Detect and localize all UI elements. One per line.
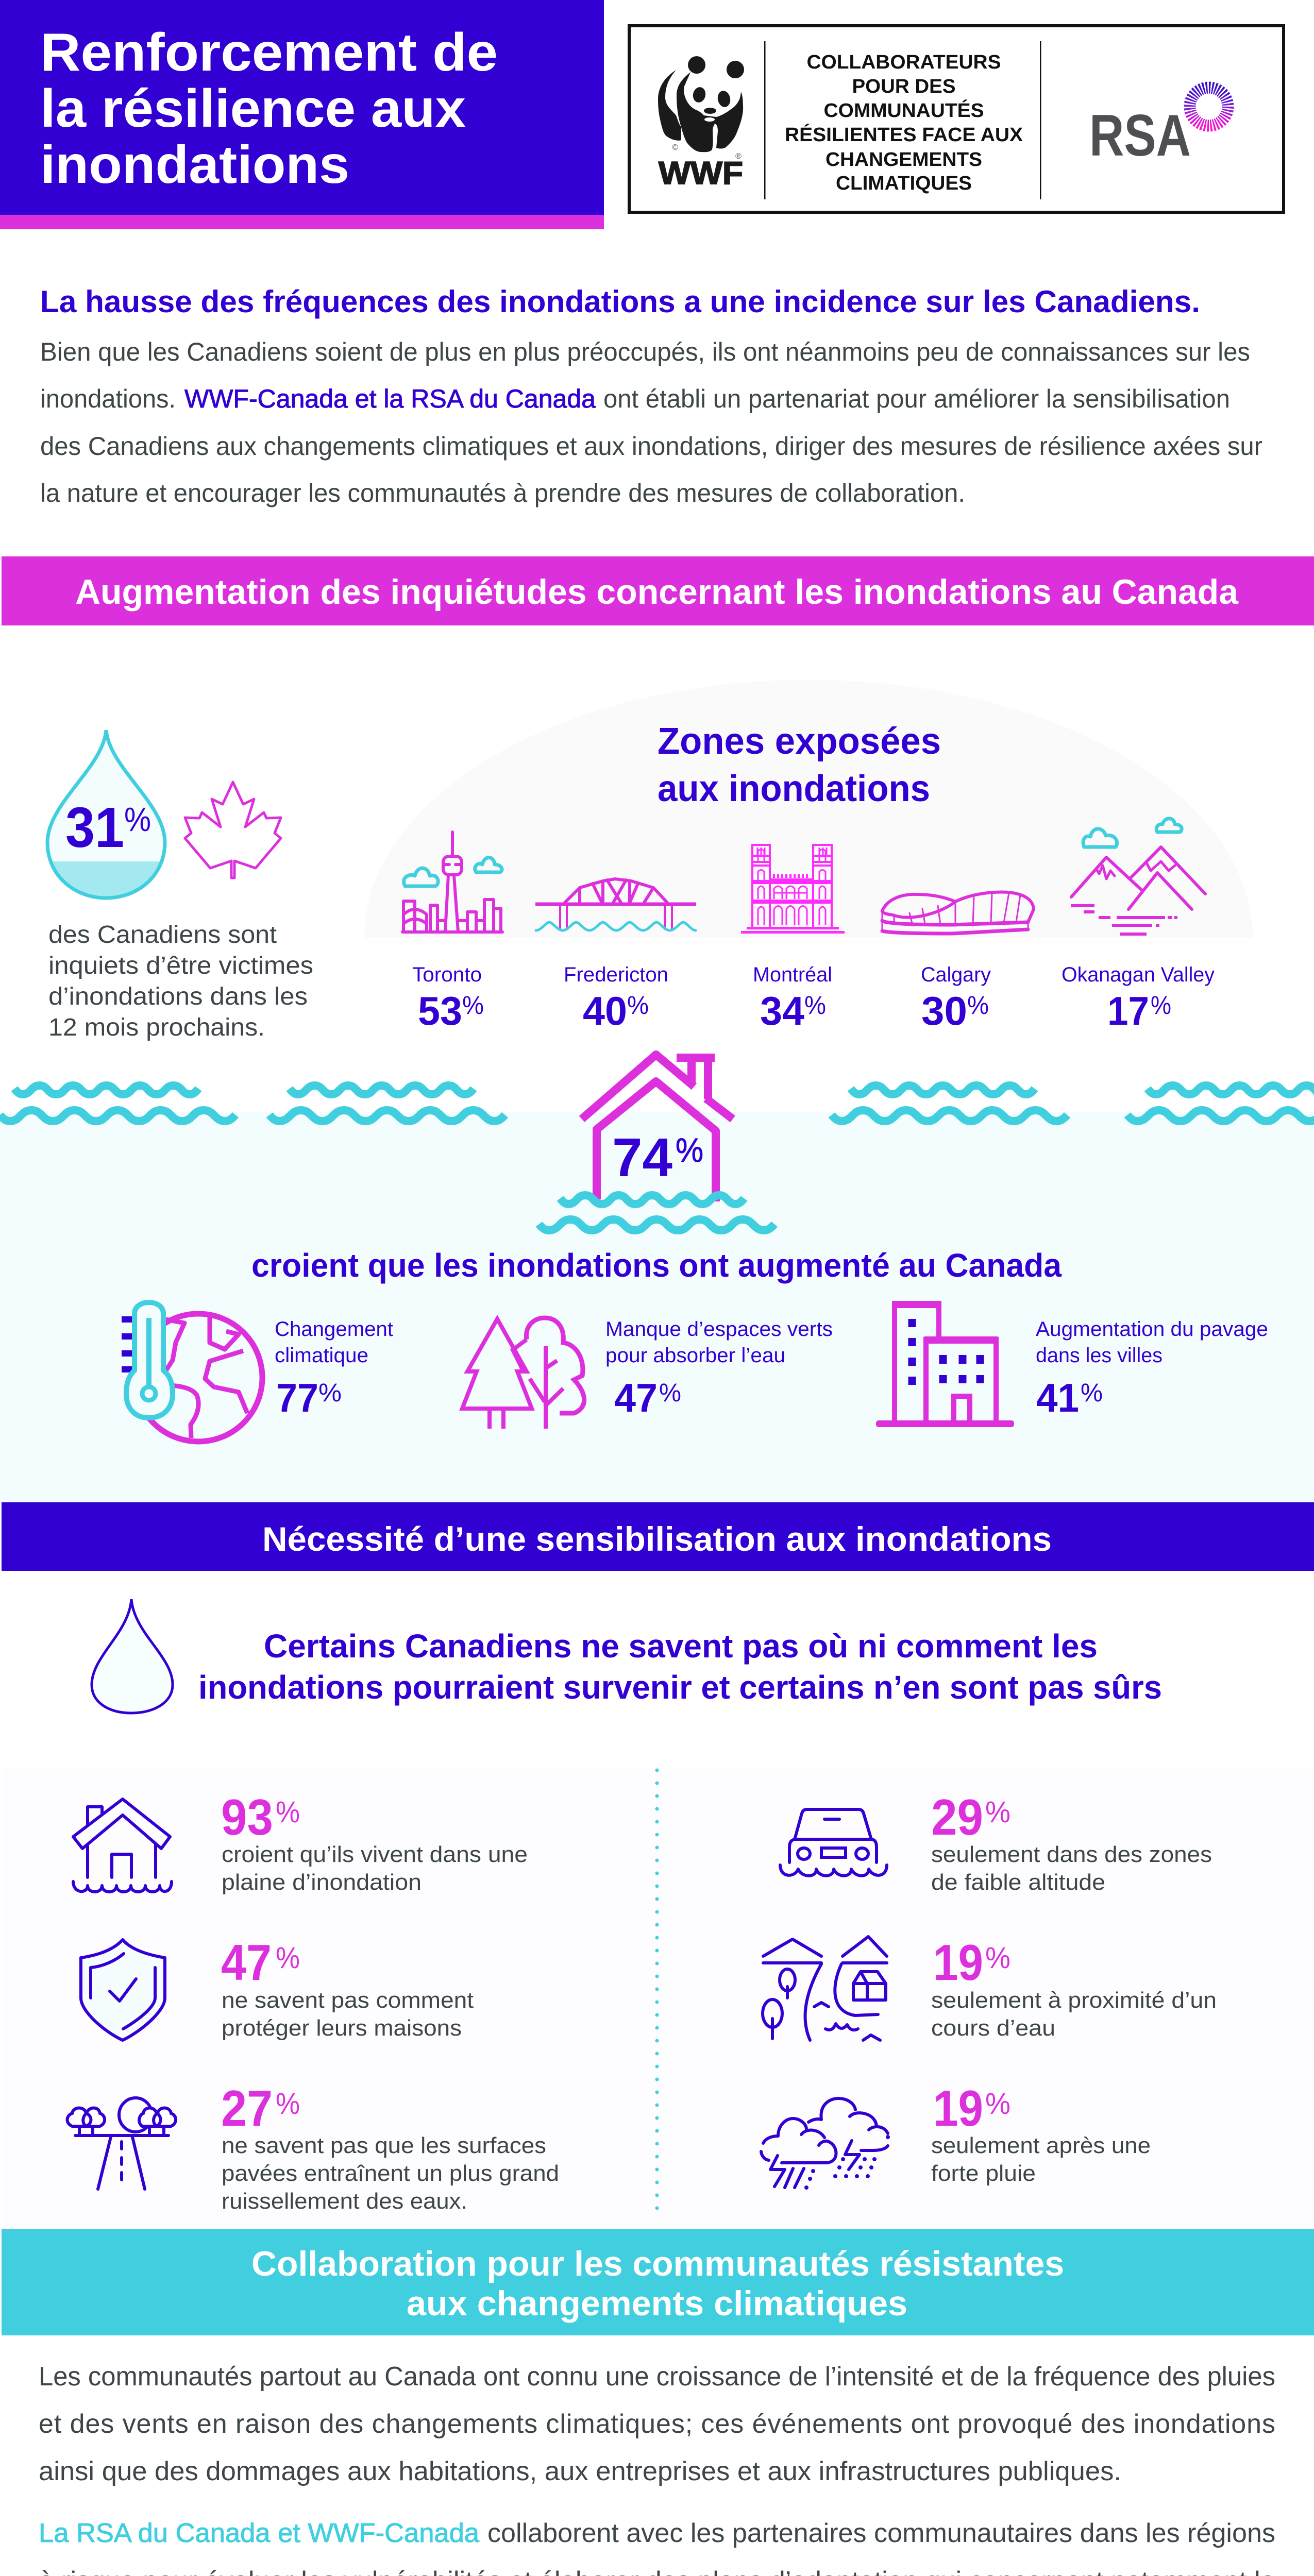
icon: house 74%: % [676, 1131, 703, 1169]
stat: changement climatique: 77 [276, 1375, 318, 1420]
31% caption [48, 921, 313, 1041]
stat: 93%: % [276, 1795, 300, 1829]
stat: 27% pavement: ne savent pas que les surfaces [222, 2133, 546, 2158]
stat: manque d'espaces verts: 47 [614, 1375, 658, 1420]
panel: 31% drop and maple leaf [47, 730, 313, 1041]
stat: 19% waterway [763, 1934, 1217, 2041]
city statistics: % [627, 991, 649, 1020]
31% caption: d’inondations dans les [48, 983, 308, 1010]
city statistics: Calgary [921, 963, 991, 986]
stat: 19% waterway: cours d’eau [931, 2015, 1055, 2041]
paragraph 1: et des vents en raison des changements climatiques; ces événements ont provoqué des inondations [39, 2409, 1275, 2439]
icon: maple leaf [185, 782, 281, 878]
stat: 19% waterway: 19 [933, 1934, 983, 1991]
stat: manque d'espaces verts [462, 1318, 833, 1429]
icon: flooded house [73, 1799, 172, 1892]
city statistics: Toronto [412, 963, 482, 986]
stat: 47% protection: ne savent pas comment [222, 1988, 474, 2013]
intro paragraph: la nature et encourager les communautés à prendre des mesures de collaboration. [40, 479, 965, 507]
icon: Toronto skyline [402, 832, 502, 932]
stat: 19% heavy rain: % [985, 2087, 1010, 2121]
section banner: Collaboration [2, 2229, 1314, 2335]
city statistics: Montréal [753, 963, 832, 986]
stat: 29% low altitude: seulement dans des zones [931, 1842, 1212, 1867]
panel: awareness heading [92, 1599, 1162, 1713]
partnership text: COLLABORATEURS [807, 52, 1001, 73]
section banner: Collaboration: Collaboration pour les communautés résistantes [251, 2244, 1064, 2283]
panel: partner logos [629, 26, 1284, 212]
intro paragraph: inondations. [40, 384, 176, 413]
31% caption: inquiets d’être victimes [48, 952, 313, 979]
flood waves [0, 1086, 1314, 1121]
stat: 93%: croient qu’ils vivent dans une [222, 1842, 528, 1867]
city statistics: % [967, 991, 989, 1020]
stat: 27% pavement: ruissellement des eaux. [222, 2189, 467, 2214]
icon: Okanagan mountains [1071, 819, 1205, 934]
awareness heading text: inondations pourraient survenir et certains n’en sont pas sûrs [198, 1669, 1162, 1706]
31% caption: des Canadiens sont [48, 921, 277, 948]
title: inondations [40, 135, 349, 195]
city statistics: 53 [418, 988, 462, 1033]
icon: WWF panda logo [658, 56, 744, 191]
icon: flooded car [780, 1809, 887, 1876]
paragraph 1 [39, 2362, 1275, 2486]
partnership text: CLIMATIQUES [836, 173, 972, 194]
paragraph 1: Les communautés partout au Canada ont connu une croissance de l’intensité et de la fréquence des pluies [39, 2362, 1275, 2392]
stat: 29% low altitude: % [985, 1795, 1010, 1829]
collaboration text block [39, 2362, 1275, 2576]
stat: changement climatique: % [318, 1378, 342, 1407]
icon: WWF panda logo: ® [735, 152, 742, 161]
icon: river and houses [763, 1937, 887, 2040]
stat: 19% heavy rain [761, 2080, 1151, 2188]
icon: shield [81, 1940, 165, 2040]
title: la résilience aux [40, 79, 466, 139]
stat: 19% waterway: seulement à proximité d’un [931, 1988, 1217, 2013]
zones heading [658, 721, 941, 809]
section banner: Augmentation des inquiétudes: Augmentation des inquiétudes concernant les inondations au Canada [75, 572, 1239, 612]
header title block [0, 0, 604, 229]
stat: changement climatique [122, 1302, 393, 1442]
partnership text: POUR DES [852, 76, 955, 97]
intro heading: La hausse des fréquences des inondations a une incidence sur les Canadiens. [40, 284, 1200, 319]
zones heading: aux inondations [658, 768, 930, 809]
partnership text: COMMUNAUTÉS [823, 99, 984, 122]
section banner: Nécessité d'une sensibilisation: Nécessité d’une sensibilisation aux inondations [262, 1520, 1052, 1558]
paragraph 2 [39, 2518, 1275, 2576]
intro paragraph [40, 337, 1262, 507]
stat: 29% low altitude: de faible altitude [931, 1870, 1105, 1895]
city statistics: 30 [921, 988, 967, 1033]
city statistics: Okanagan Valley [1062, 963, 1215, 986]
city statistics: % [462, 991, 484, 1020]
panel: awareness statistics [2, 1768, 1314, 2229]
icon: road with trees [68, 2098, 176, 2189]
intro text block [40, 284, 1262, 507]
partnership text: CHANGEMENTS [826, 149, 982, 171]
stat: augmentation du pavage [876, 1301, 1268, 1427]
city statistics: % [804, 991, 826, 1020]
icon: house 74% [539, 1054, 774, 1230]
city statistics: 40 [583, 988, 627, 1033]
stat: augmentation du pavage: 41 [1036, 1375, 1079, 1420]
partnership text: RÉSILIENTES FACE AUX [785, 123, 1023, 146]
icon: Montréal basilica [741, 845, 845, 934]
intro paragraph: des Canadiens aux changements climatiques et aux inondations, diriger des mesures de résilience axées sur [40, 432, 1262, 461]
stat: changement climatique: climatique [275, 1344, 368, 1367]
icon: globe and thermometer [122, 1302, 262, 1442]
icon: RSA logo: RSA [1089, 103, 1191, 168]
icon: buildings [876, 1301, 1014, 1427]
paragraph 2: collaborent avec les partenaires communautaires dans les régions [487, 2518, 1275, 2548]
city statistics: 34 [760, 988, 804, 1033]
icon: Fredericton bridge [535, 879, 696, 930]
intro paragraph: Bien que les Canadiens soient de plus en plus préoccupés, ils ont néanmoins peu de connaissances sur les [40, 337, 1250, 366]
awareness heading text [198, 1628, 1162, 1706]
icon: Calgary saddledome [882, 892, 1034, 934]
panel: flood band 74% [0, 1054, 1314, 1502]
stat: 27% pavement [68, 2080, 559, 2214]
icon: water drop 31%: 31 [65, 796, 124, 859]
city statistics: 17 [1107, 988, 1149, 1033]
stat: 19% heavy rain: forte pluie [931, 2161, 1036, 2186]
stat: augmentation du pavage: Augmentation du pavage [1036, 1318, 1268, 1341]
icon: house 74%: 74 [612, 1127, 672, 1188]
stat: 29% low altitude: 29 [931, 1789, 983, 1845]
stat: augmentation du pavage: % [1081, 1378, 1103, 1407]
icon: trees [462, 1318, 584, 1429]
title: Renforcement de [40, 23, 498, 82]
stat: 47% protection [81, 1934, 474, 2041]
intro paragraph: WWF-Canada et la RSA du Canada [184, 384, 596, 413]
stat: manque d'espaces verts: % [659, 1378, 681, 1407]
stat: 27% pavement: 27 [221, 2080, 273, 2137]
icon: water drop outline [92, 1599, 173, 1713]
stat: 93%: 93 [221, 1789, 273, 1845]
partnership text [785, 52, 1023, 194]
intro paragraph: ont établi un partenariat pour améliorer la sensibilisation [603, 384, 1230, 413]
icon: WWF panda logo: © [672, 143, 678, 152]
stat: 47% protection: % [276, 1941, 300, 1975]
stat: 29% low altitude [780, 1789, 1212, 1895]
stat: 27% pavement: % [276, 2087, 300, 2121]
awareness heading text: Certains Canadiens ne savent pas où ni comment les [264, 1628, 1098, 1665]
stat: 93%: plaine d’inondation [222, 1870, 422, 1895]
stat: 19% heavy rain: seulement après une [931, 2133, 1151, 2158]
stat: augmentation du pavage: dans les villes [1036, 1344, 1163, 1367]
zones heading: Zones exposées [658, 721, 941, 762]
paragraph 2: La RSA du Canada et WWF-Canada [39, 2518, 479, 2548]
title [40, 23, 498, 195]
icon: WWF panda logo: WWF [659, 156, 743, 191]
section banner: Augmentation des inquiétudes [2, 556, 1314, 625]
icon: water drop 31%: % [124, 800, 151, 838]
stat: changement climatique: Changement [275, 1318, 393, 1341]
stat: 27% pavement: pavées entraînent un plus grand [222, 2161, 559, 2186]
stat: 47% protection: protéger leurs maisons [222, 2015, 462, 2041]
paragraph 1: ainsi que des dommages aux habitations, aux entreprises et aux infrastructures publiques. [39, 2456, 1121, 2486]
city statistics: Fredericton [564, 963, 668, 986]
stat: 47% protection: 47 [221, 1934, 272, 1991]
panel: zones exposées [364, 680, 1253, 1033]
74% caption: croient que les inondations ont augmenté au Canada [251, 1247, 1062, 1284]
city statistics [412, 963, 1215, 1033]
stat: manque d'espaces verts: Manque d’espaces verts [605, 1318, 833, 1341]
31% caption: 12 mois prochains. [48, 1014, 265, 1041]
icon: water drop 31% [47, 730, 165, 898]
stat: manque d'espaces verts: pour absorber l’eau [605, 1344, 785, 1367]
stat: 93% [73, 1789, 528, 1895]
stat: 19% heavy rain: 19 [933, 2080, 983, 2137]
icon: storm clouds [761, 2098, 888, 2188]
section banner: Collaboration: aux changements climatiques [407, 2284, 907, 2323]
stat: 19% waterway: % [985, 1941, 1010, 1975]
section banner: Nécessité d'une sensibilisation [2, 1502, 1314, 1571]
city statistics: % [1151, 991, 1171, 1020]
